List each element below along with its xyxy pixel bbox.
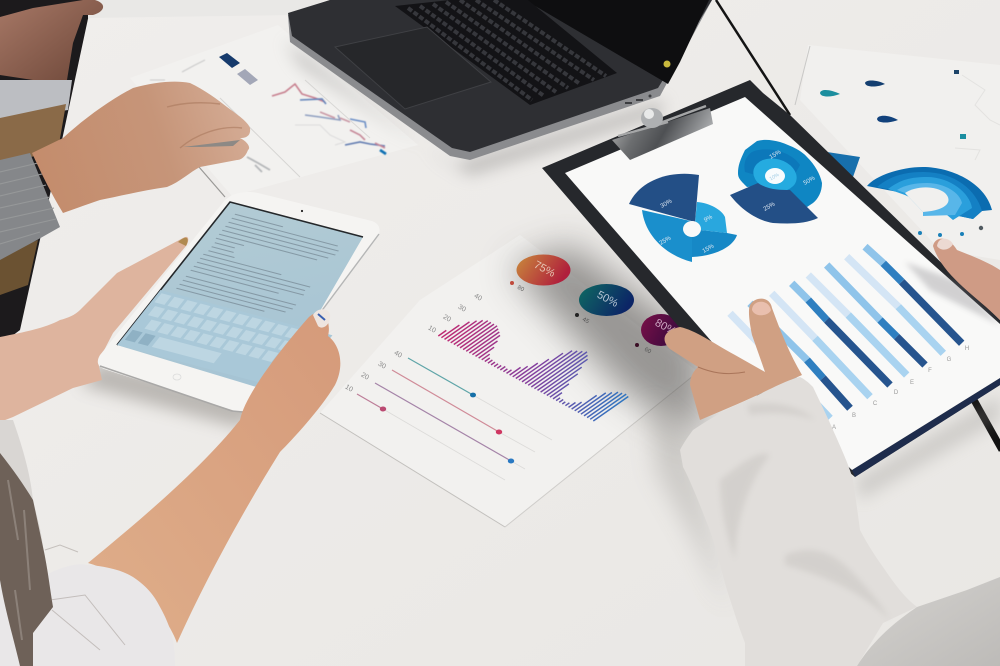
bar A <box>730 313 830 418</box>
bar G <box>847 257 943 353</box>
y axis labels <box>427 293 483 335</box>
bar F <box>827 265 925 365</box>
percentage circle 75%: 75% <box>532 259 557 280</box>
hand: holding clipboard right <box>933 239 1000 320</box>
arm and thumb: front of tablet <box>88 309 340 643</box>
dark badge <box>219 53 240 68</box>
text lines <box>176 214 345 317</box>
map pins <box>820 70 966 139</box>
percentage circle 50%: 50% <box>595 289 620 310</box>
home button <box>173 374 181 380</box>
axis letters: E <box>910 380 914 386</box>
sleeve folds <box>720 403 890 620</box>
hand: top-left corner <box>0 0 103 80</box>
arc chart hole <box>905 187 949 212</box>
hand: behind tablet <box>0 237 188 422</box>
slider chart <box>344 350 552 480</box>
bar H <box>865 247 962 343</box>
arc chart <box>867 167 992 220</box>
axis letters: D <box>894 390 899 396</box>
pie labels <box>763 149 817 213</box>
percentage circle 50% <box>575 284 634 326</box>
pie labels: 15% <box>769 149 783 161</box>
percentage circle 80%: 80% <box>653 317 678 338</box>
y axis labels: 10 <box>427 325 437 335</box>
slider 20 <box>360 372 514 464</box>
pie labels: 25% <box>763 201 777 213</box>
grey badge <box>237 69 258 85</box>
top paper edge <box>88 0 325 18</box>
bar E <box>808 275 907 375</box>
paper: top left with candlestick charts <box>130 25 418 197</box>
slider 10 <box>344 384 386 412</box>
axis letters: F <box>928 368 932 374</box>
screen edge <box>525 0 709 84</box>
faint slider tracks <box>383 395 552 480</box>
slider 30: 30 <box>377 361 387 371</box>
y axis labels: 20 <box>442 314 452 324</box>
faint route lines <box>955 75 1000 160</box>
axis letters: H <box>965 346 969 352</box>
clipboard shadow on the centre paper and table <box>510 245 728 610</box>
axis letters <box>832 346 969 431</box>
pie labels: 15% <box>702 243 716 255</box>
slider 40: 40 <box>393 350 403 360</box>
shadow of holding hand <box>905 262 1000 325</box>
bar C <box>772 293 870 397</box>
percentage circle 75% <box>510 254 570 294</box>
laptop shadow <box>285 40 665 175</box>
slider 40 <box>393 350 476 397</box>
stacked bar chart <box>730 247 969 431</box>
outer ring <box>738 140 822 207</box>
axis letters: B <box>852 413 856 419</box>
slider 30 <box>377 361 502 434</box>
sector 30% <box>629 174 699 222</box>
hand: on the chart paper <box>32 82 250 213</box>
percentage circle 75%: 80 <box>516 285 525 294</box>
arc chart markers <box>918 226 983 237</box>
sleeve: grey striped cuff, top-left person <box>0 153 60 260</box>
percentage circle 80% <box>635 314 681 356</box>
small blue triangle tab <box>827 152 860 177</box>
tablet screen <box>117 202 363 392</box>
axis letters: G <box>947 357 952 363</box>
hair <box>0 420 125 666</box>
pie labels: 9% <box>703 214 714 224</box>
clipboard shadow on the table <box>855 395 1000 500</box>
keyboard background <box>117 290 332 390</box>
camera <box>301 210 303 212</box>
striped area bar chart <box>427 293 628 421</box>
y axis labels: 30 <box>457 304 467 314</box>
percentage circle 80%: 60 <box>643 347 652 356</box>
slider 20: 20 <box>360 372 370 382</box>
table seams <box>716 0 1000 450</box>
shirt: white <box>0 564 175 666</box>
pie labels: 50% <box>803 175 817 187</box>
sector 25% <box>642 210 695 262</box>
sleeve: grey sweater <box>857 577 1000 666</box>
hand: holding clipboard bottom <box>665 299 802 420</box>
y axis labels: 40 <box>473 293 483 303</box>
tablet <box>98 192 395 412</box>
keyboard keys <box>139 298 327 366</box>
slider 10: 10 <box>344 384 354 394</box>
bar B <box>750 303 850 408</box>
pie labels: 30% <box>660 198 674 210</box>
bar D <box>792 283 890 385</box>
clipboard <box>542 80 1000 477</box>
sector 15% <box>692 229 737 257</box>
paper: centre with circles, bars and sliders <box>320 235 698 527</box>
candlestick traces <box>150 60 386 172</box>
pie chart: right <box>730 140 822 223</box>
tablet shadow on the table <box>80 362 270 428</box>
metal clip <box>612 106 713 160</box>
laptop <box>288 0 712 160</box>
pie labels: 25% <box>659 235 673 247</box>
axis letters: A <box>832 425 836 431</box>
screen text and keyboard <box>117 211 395 390</box>
axis letters: C <box>873 401 878 407</box>
centre disc <box>750 154 800 196</box>
keyboard <box>395 0 617 105</box>
sleeve: white sweater <box>680 377 1000 666</box>
inner ring <box>744 149 800 183</box>
floor and background left of the table <box>0 0 92 345</box>
ports <box>625 94 652 104</box>
pie chart: left <box>629 174 737 262</box>
clipboard page <box>565 97 1000 470</box>
sector 9% <box>692 202 727 233</box>
trackpad <box>335 27 491 109</box>
pie labels <box>659 198 716 255</box>
pie labels: 10% <box>769 172 781 182</box>
percentage circle 50%: 45 <box>581 317 590 326</box>
paper: top right with pins and arc chart <box>795 45 1000 260</box>
sector 25% <box>730 183 818 223</box>
centre hole <box>683 221 701 237</box>
